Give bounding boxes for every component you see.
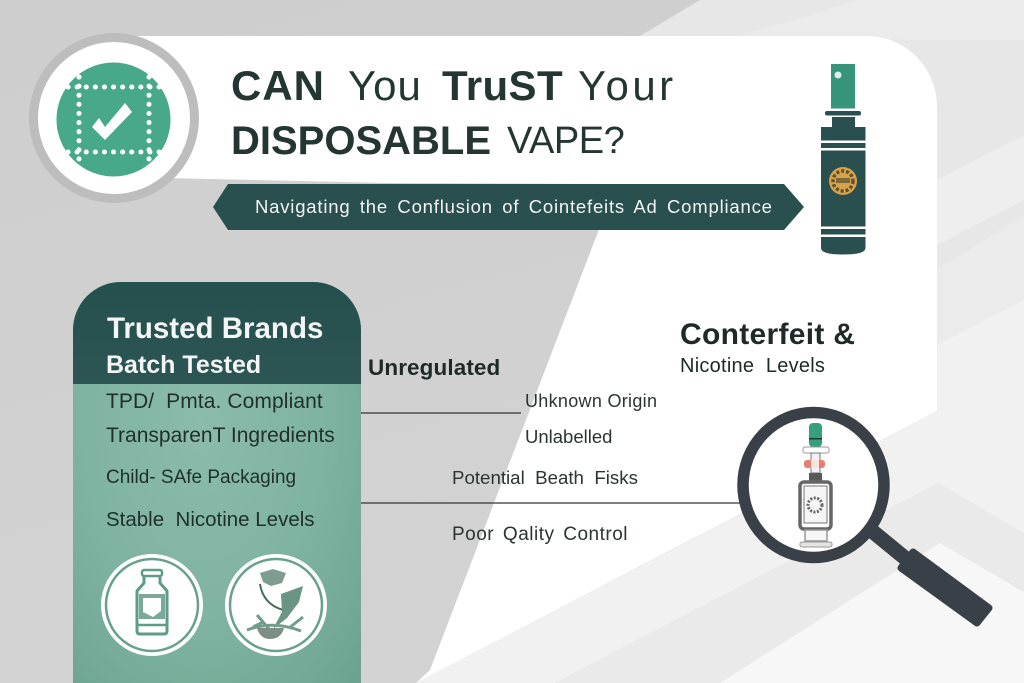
title: VAPE? bbox=[507, 120, 624, 162]
panel list: TransparenT Ingredients bbox=[106, 424, 335, 447]
title: CAN bbox=[231, 62, 325, 108]
text: risks list: Potential Beath Fisks bbox=[452, 467, 638, 488]
icons: bottle and herb bbox=[101, 554, 327, 656]
heading: counterfeit: Conterfeit & bbox=[680, 318, 855, 351]
title bbox=[231, 62, 676, 163]
title: DISPOSABLE bbox=[231, 119, 491, 163]
text: risks list: Poor Qality Control bbox=[452, 524, 628, 545]
heading: counterfeit: Nicotine Levels bbox=[680, 355, 825, 377]
text: risks list: Unlabelled bbox=[525, 426, 612, 447]
title: Your bbox=[578, 62, 676, 108]
title: You bbox=[348, 62, 422, 108]
panel list: TPD/ Pmta. Compliant bbox=[106, 390, 323, 413]
heading: counterfeit bbox=[680, 318, 855, 377]
heading: unregulated: Unregulated bbox=[368, 355, 500, 380]
panel list: Stable Nicotine Levels bbox=[106, 508, 315, 531]
title: TruST bbox=[442, 62, 563, 108]
panel list bbox=[106, 390, 335, 531]
text: risks list: Uhknown Origin bbox=[525, 391, 657, 411]
panel heading: Trusted Brands bbox=[107, 312, 323, 345]
subtitle ribbon bbox=[213, 184, 804, 230]
text: risks list bbox=[452, 391, 657, 545]
panel heading bbox=[73, 282, 361, 384]
panel: trusted brands bbox=[73, 282, 361, 683]
panel heading: Batch Tested bbox=[106, 351, 261, 379]
subtitle ribbon: Navigating the Conflusion of Cointefeits Ad Compliance bbox=[255, 196, 773, 217]
panel list: Child- SAfe Packaging bbox=[106, 467, 296, 488]
